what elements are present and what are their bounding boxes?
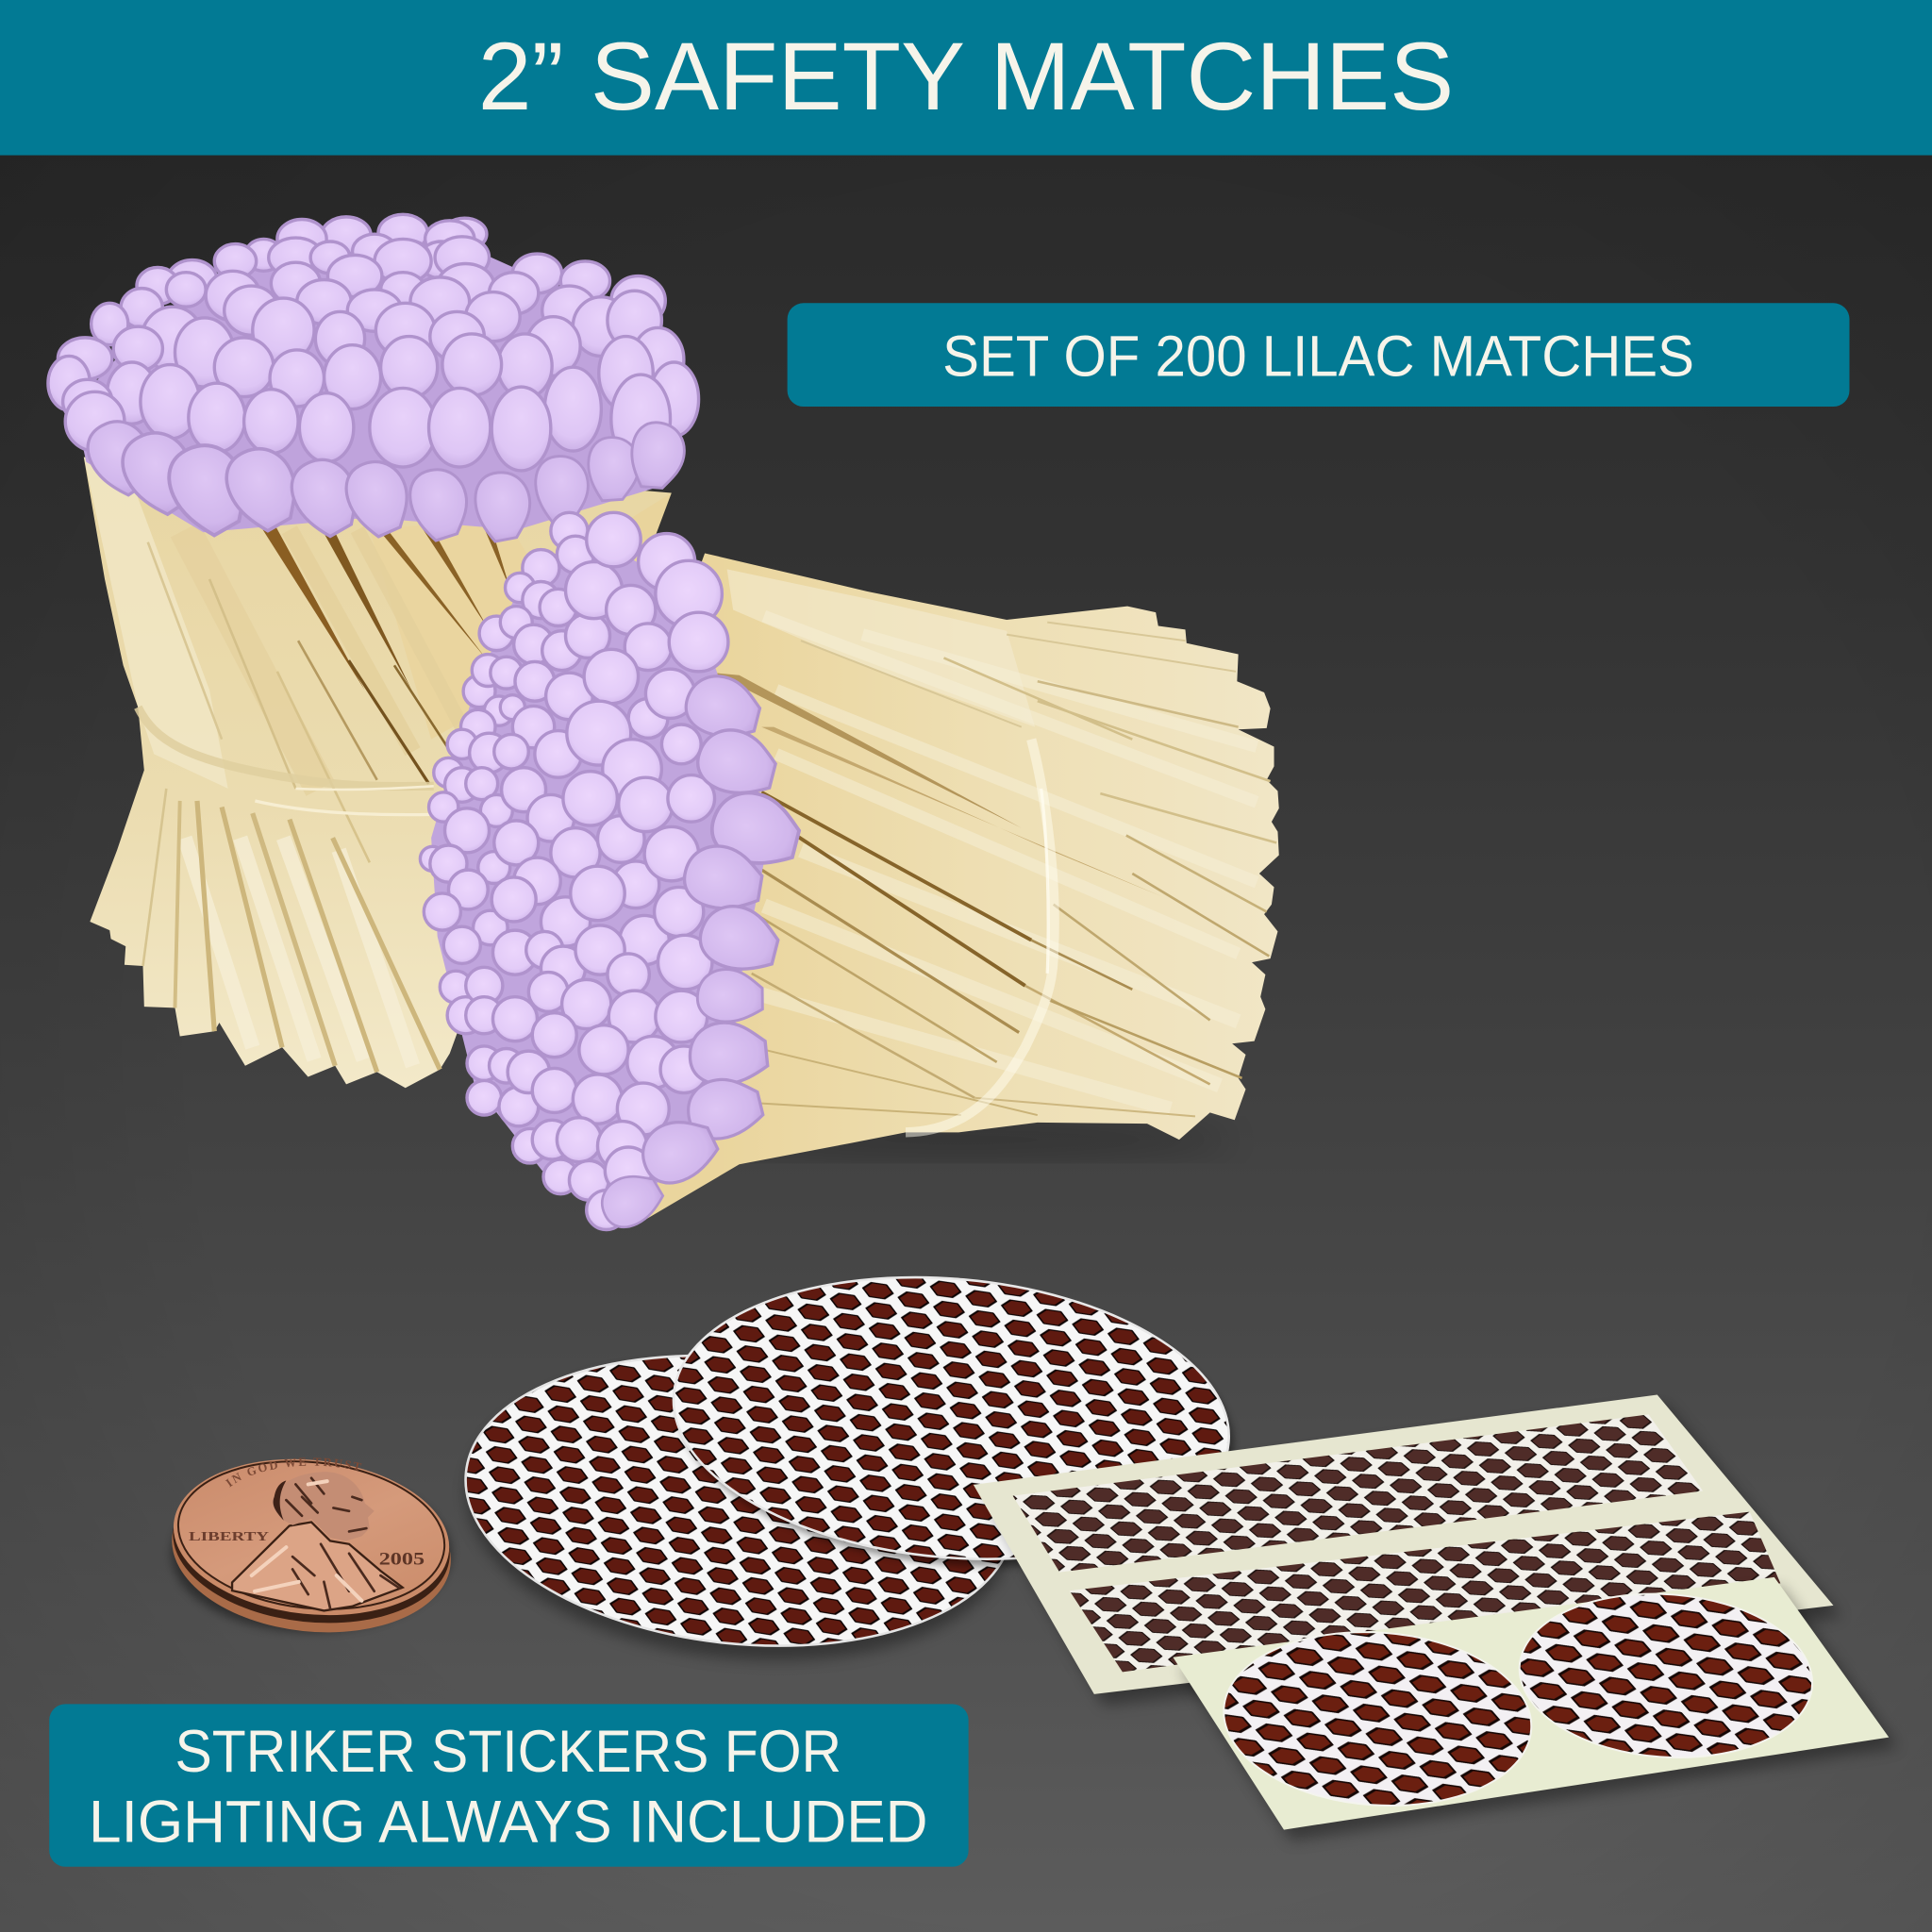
lying bundle shadow bbox=[690, 1124, 1232, 1155]
striker discs bbox=[451, 1256, 1245, 1687]
callout: set of 200 lilac matches bbox=[788, 303, 1849, 407]
striker strip sheet bbox=[974, 1395, 1840, 1706]
clear elastic band bbox=[906, 740, 1055, 1132]
standing bundle lilac heads bbox=[48, 214, 699, 544]
round sticker sheet bbox=[1173, 1577, 1897, 1840]
back striker disc bbox=[451, 1330, 1027, 1672]
penny date: 2005 bbox=[379, 1549, 425, 1569]
title: 2” SAFETY MATCHES bbox=[478, 23, 1454, 130]
disc shadows bbox=[452, 1340, 1026, 1687]
standing bundle sticks bbox=[84, 458, 672, 1088]
callout: striker stickers bbox=[49, 1704, 969, 1867]
callout: striker stickers: LIGHTING ALWAYS INCLUDED bbox=[89, 1790, 928, 1856]
round sticker left bbox=[1218, 1622, 1537, 1816]
callout: striker stickers: STRIKER STICKERS FOR bbox=[175, 1719, 841, 1785]
striker strip one bbox=[1013, 1414, 1703, 1573]
Lincoln bust bbox=[232, 1522, 403, 1610]
penny: IN GOD WE TRUST bbox=[225, 1457, 362, 1487]
header banner bbox=[0, 0, 1932, 156]
lying bundle sticks bbox=[591, 553, 1279, 1226]
callout: set of 200 lilac matches: SET OF 200 LILAC MATCHES bbox=[942, 324, 1694, 389]
penny bbox=[169, 1457, 455, 1636]
round sticker right bbox=[1514, 1584, 1818, 1767]
lying bundle lilac heads bbox=[420, 512, 808, 1235]
striker strip two bbox=[1070, 1512, 1780, 1672]
penny LIBERTY: LIBERTY bbox=[189, 1530, 269, 1544]
penny inscription bbox=[229, 1466, 408, 1492]
front striker disc bbox=[661, 1256, 1241, 1581]
standing bundle of matches bbox=[48, 214, 699, 1088]
lying bundle of matches bbox=[420, 512, 1279, 1235]
